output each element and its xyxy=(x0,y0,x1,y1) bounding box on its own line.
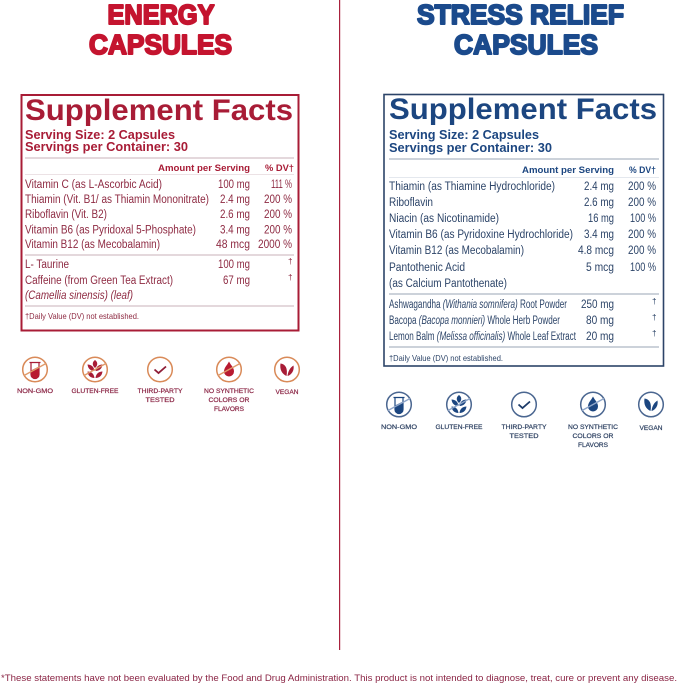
icon: gluten-free xyxy=(83,357,107,382)
serving info: Serving Size: 2 Capsules xyxy=(25,128,175,142)
herbal ingredient rows: † xyxy=(652,297,657,306)
serving info xyxy=(25,128,188,154)
panel title: Supplement Facts xyxy=(389,93,657,126)
vitamin rows: 200 % xyxy=(264,209,292,221)
vitamin rows: 2.4 mg xyxy=(220,194,250,206)
column headers: % DV† xyxy=(265,163,294,174)
vitamin rows: 200 % xyxy=(628,197,656,209)
vitamin rows: 100 % xyxy=(630,213,656,225)
vitamin rows: 200 % xyxy=(628,181,656,193)
vitamin rows: 200 % xyxy=(264,224,292,236)
vitamin rows: Thiamin (as Thiamine Hydrochloride) xyxy=(389,181,555,193)
heading: energy capsules: CAPSULES xyxy=(89,29,232,60)
vitamin rows: 2.4 mg xyxy=(584,181,614,193)
vitamin rows: 4.8 mcg xyxy=(578,245,614,257)
vitamin rows: 200 % xyxy=(628,245,656,257)
herbal ingredient rows: 20 mg xyxy=(586,331,614,343)
other ingredient rows: L- Taurine xyxy=(25,259,69,271)
vitamin rows: 200 % xyxy=(628,229,656,241)
panel: stress relief supplement facts xyxy=(384,93,664,366)
vitamin rows: 111 % xyxy=(271,179,292,191)
other ingredient rows: † xyxy=(288,257,293,266)
serving info xyxy=(389,128,552,155)
icon row: energy badges xyxy=(17,357,299,413)
vitamin rows: (as Calcium Pantothenate) xyxy=(389,278,507,290)
vitamin rows: Thiamin (Vit. B1/ as Thiamin Mononitrate) xyxy=(25,194,209,206)
footnote: †Daily Value (DV) not established. xyxy=(25,312,139,321)
vitamin rows: 5 mcg xyxy=(586,262,614,274)
icon: third-party tested xyxy=(512,392,536,417)
panel: energy supplement facts xyxy=(22,94,298,330)
serving info: Serving Size: 2 Capsules xyxy=(389,128,539,142)
vitamin rows xyxy=(25,179,292,251)
vitamin rows: Riboflavin xyxy=(389,197,433,209)
herbal ingredient rows xyxy=(389,297,657,343)
vitamin rows: Riboflavin (Vit. B2) xyxy=(25,209,107,221)
badge labels xyxy=(381,424,663,449)
herbal ingredient rows: † xyxy=(652,329,657,338)
icon row: stress relief badges xyxy=(381,392,663,449)
icon: gluten-free xyxy=(447,392,471,417)
icon: no synthetic colors xyxy=(217,357,241,382)
other ingredient rows: (Camellia sinensis) (leaf) xyxy=(25,290,133,302)
icon: third-party tested xyxy=(148,357,172,382)
herbal ingredient rows: Bacopa (Bacopa monnieri) Whole Herb Powder xyxy=(389,315,560,327)
vitamin rows: 100 mg xyxy=(218,179,250,191)
column headers: % DV† xyxy=(629,165,656,176)
badge labels: NON-GMO xyxy=(17,388,53,395)
vitamin rows: Vitamin B6 (as Pyridoxal 5-Phosphate) xyxy=(25,224,196,236)
disclaimer footnote: *These statements have not been evaluated by the Food and Drug Administration. This product is not intended to diagnose, treat, cure or prevent any disease. xyxy=(1,673,677,684)
badge labels: COLORS OR xyxy=(572,433,614,440)
vitamin rows: 200 % xyxy=(264,194,292,206)
center divider xyxy=(339,0,340,650)
badge labels xyxy=(17,388,299,413)
vitamin rows: 2.6 mg xyxy=(584,197,614,209)
heading: stress relief capsules: CAPSULES xyxy=(454,29,598,60)
panel title: Supplement Facts xyxy=(25,94,293,127)
other ingredient rows: 100 mg xyxy=(218,259,250,271)
icon: vegan xyxy=(275,357,299,382)
badge labels: COLORS OR xyxy=(208,397,250,404)
vitamin rows: Vitamin B6 (as Pyridoxine Hydrochloride) xyxy=(389,229,573,241)
heading: stress relief capsules xyxy=(417,0,624,60)
column headers: Amount per Serving xyxy=(158,163,250,174)
icon: non-gmo xyxy=(387,392,411,417)
badge labels: GLUTEN-FREE xyxy=(72,388,119,395)
vitamin rows: 2000 % xyxy=(258,239,292,251)
vitamin rows: Vitamin C (as L-Ascorbic Acid) xyxy=(25,179,162,191)
other ingredient rows: † xyxy=(288,273,293,282)
badge labels: VEGAN xyxy=(276,389,299,396)
other ingredient rows: 67 mg xyxy=(223,275,250,287)
vitamin rows xyxy=(389,181,656,290)
vitamin rows: Pantothenic Acid xyxy=(389,262,465,274)
vitamin rows: 16 mg xyxy=(588,213,614,225)
badge labels: THIRD-PARTY xyxy=(502,424,547,431)
vitamin rows: 48 mcg xyxy=(216,239,250,251)
icon: no synthetic colors xyxy=(581,392,605,417)
vitamin rows: Vitamin B12 (as Mecobalamin) xyxy=(389,245,524,257)
vitamin rows: Vitamin B12 (as Mecobalamin) xyxy=(25,239,160,251)
column headers xyxy=(158,163,294,174)
serving info: Servings per Container: 30 xyxy=(25,140,188,154)
icon: non-gmo xyxy=(23,357,47,382)
herbal ingredient rows: 80 mg xyxy=(586,315,614,327)
badge labels: TESTED xyxy=(146,397,175,404)
badge labels: NO SYNTHETIC xyxy=(568,424,618,431)
footnote: †Daily Value (DV) not established. xyxy=(389,354,503,363)
badge labels: NON-GMO xyxy=(381,424,417,431)
badge labels: THIRD-PARTY xyxy=(138,388,183,395)
vitamin rows: 3.4 mg xyxy=(220,224,250,236)
herbal ingredient rows: Ashwagandha (Withania somnifera) Root Powder xyxy=(389,299,567,311)
vitamin rows: 2.6 mg xyxy=(220,209,250,221)
badge labels: NO SYNTHETIC xyxy=(204,388,254,395)
column headers xyxy=(522,165,656,176)
heading: energy capsules xyxy=(89,0,232,60)
column headers: Amount per Serving xyxy=(522,165,614,176)
icon: vegan xyxy=(639,392,663,417)
herbal ingredient rows: † xyxy=(652,313,657,322)
badge labels: FLAVORS xyxy=(214,406,244,413)
badge labels: GLUTEN-FREE xyxy=(436,424,483,431)
badge labels: TESTED xyxy=(510,433,539,440)
vitamin rows: 100 % xyxy=(630,262,656,274)
herbal ingredient rows: Lemon Balm (Melissa officinalis) Whole Leaf Extract xyxy=(389,331,577,343)
vitamin rows: 3.4 mg xyxy=(584,229,614,241)
badge labels: FLAVORS xyxy=(578,442,608,449)
herbal ingredient rows: 250 mg xyxy=(581,299,614,311)
serving info: Servings per Container: 30 xyxy=(389,141,552,155)
vitamin rows: Niacin (as Nicotinamide) xyxy=(389,213,499,225)
other ingredient rows: Caffeine (from Green Tea Extract) xyxy=(25,275,173,287)
badge labels: VEGAN xyxy=(640,425,663,432)
other ingredient rows xyxy=(25,257,293,302)
